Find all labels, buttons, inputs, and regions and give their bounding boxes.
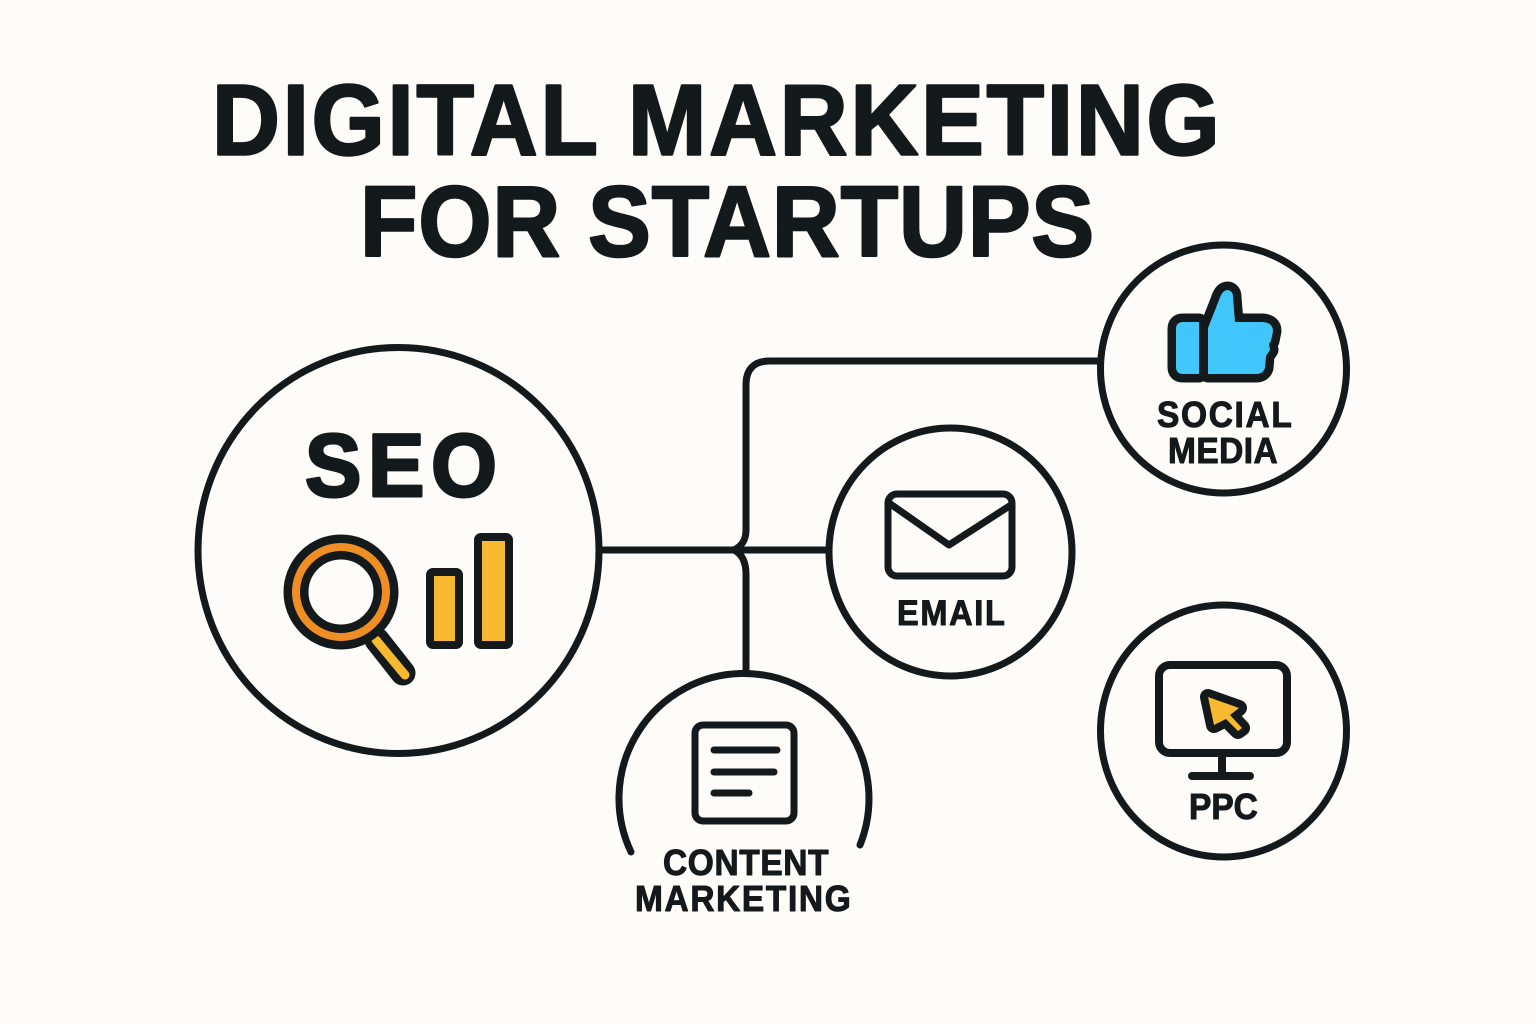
title xyxy=(212,64,1220,278)
icon: document xyxy=(695,725,794,821)
panel: content marketing xyxy=(619,673,869,919)
social media label: SOCIAL xyxy=(1157,396,1292,435)
panel: SEO xyxy=(198,348,599,754)
icon: monitor with cursor xyxy=(1159,665,1287,776)
icon: thumbs up xyxy=(1176,290,1273,374)
PPC label: PPC xyxy=(1189,788,1258,827)
social media label: MEDIA xyxy=(1168,432,1278,471)
panel: PPC xyxy=(1100,605,1346,857)
icon: magnifying glass xyxy=(296,547,405,675)
content marketing label: CONTENT xyxy=(663,844,829,883)
email label: EMAIL xyxy=(897,594,1005,633)
content marketing label: MARKETING xyxy=(635,880,851,919)
icon: bar chart xyxy=(430,537,509,645)
icon: envelope xyxy=(888,494,1012,576)
SEO label: SEO xyxy=(305,416,497,515)
title: FOR STARTUPS xyxy=(360,165,1094,278)
social media label xyxy=(1157,396,1292,471)
content marketing label xyxy=(635,844,851,919)
connector lines xyxy=(602,361,1098,671)
title: DIGITAL MARKETING xyxy=(212,64,1220,176)
panel: social media xyxy=(1100,245,1346,493)
panel: email xyxy=(829,428,1072,676)
